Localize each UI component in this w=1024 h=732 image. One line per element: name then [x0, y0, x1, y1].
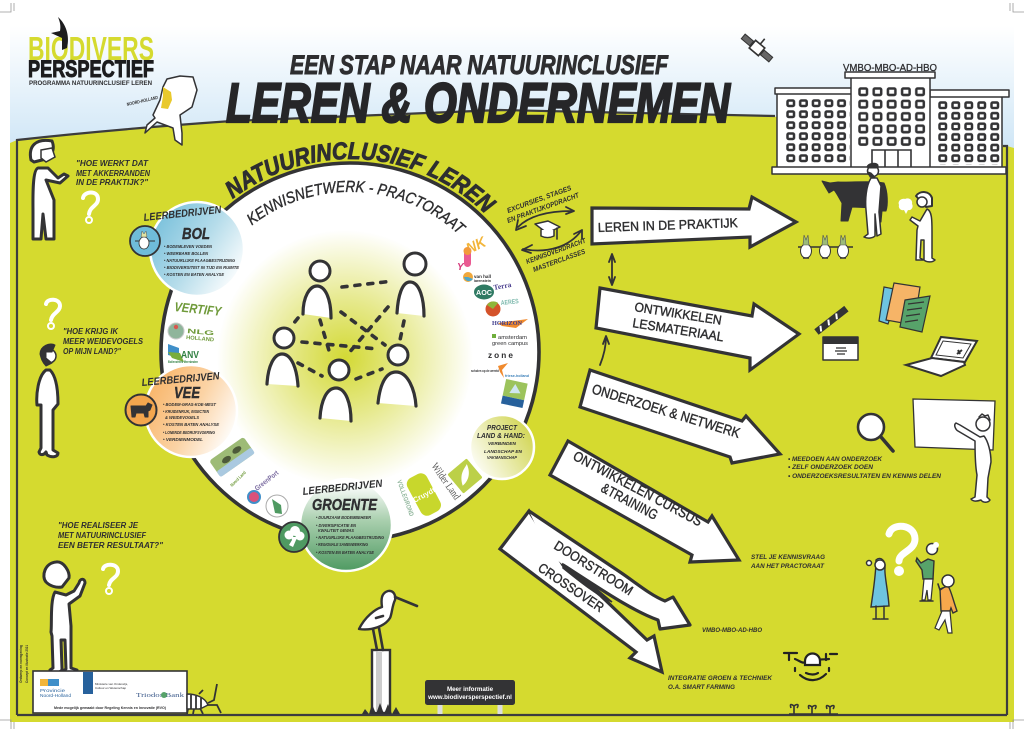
- sign board: [425, 680, 515, 705]
- bubble eyebrow: LEERBEDRIJVEN: [143, 204, 222, 224]
- figure: farmer with cow: [822, 163, 887, 238]
- logo: Rijksoverheid ministerie: [83, 672, 128, 694]
- bubble list: • LONENDE BEDRIJFSVOERING: [163, 430, 215, 435]
- bubble list: • NATUURLIJKE PLAAGBESTRIJDING: [316, 535, 384, 540]
- building base: [772, 167, 1006, 174]
- title line one: EEN STAP NAAR NATUURINCLUSIEF: [290, 50, 669, 80]
- face: [41, 148, 55, 162]
- left wing: [777, 93, 852, 168]
- logo: green leaf tile: [447, 458, 483, 494]
- logo: Cruydt tile: Cruydt: [411, 485, 437, 505]
- text: kennisvraag: AAN HET PRACTORAAT: [750, 563, 825, 570]
- knowledge exchange arrows: [506, 185, 615, 365]
- person C: [267, 328, 298, 386]
- logo: green tile with bird: [501, 379, 528, 408]
- bubble title: PROJECT: [487, 425, 518, 432]
- research list: • ONDERZOEKSRESULTATEN EN KENNIS DELEN: [788, 473, 941, 480]
- stork beak: [395, 597, 417, 606]
- figure: woman with broccoli: [899, 192, 935, 262]
- logo: ANV: Bollenstreek Meerlanden: [168, 360, 198, 364]
- logo: ANV: [168, 344, 199, 364]
- icon: black cow: [822, 181, 887, 222]
- bubble list: • DUURZAAM BODEMBEHEER: [316, 515, 372, 520]
- logo: Yonk: [457, 233, 490, 273]
- logo: Wilder Land: Wilder Land: [429, 461, 463, 502]
- icon: question mark: [46, 300, 60, 329]
- grass: [362, 703, 400, 714]
- photo tile: [209, 437, 255, 477]
- text: kennisvraag: [750, 554, 825, 570]
- question line two: MEER WEIDEVOGELS: [63, 336, 143, 346]
- map: Netherlands with Noord-Holland: [126, 76, 197, 145]
- logo: Aeres: [486, 298, 520, 316]
- panel box: [33, 671, 187, 713]
- credits vertical: [19, 645, 29, 683]
- bubble list: • WEERBARE BOLLEN: [164, 251, 209, 256]
- logo: Horizon: [492, 319, 528, 328]
- logo: Vollegrond: VOLLEGROND: [395, 479, 415, 518]
- bubble list: • KOSTEN BATEN ANALYSE: [163, 422, 220, 427]
- logo: AOC Terra: AOC: [476, 290, 492, 297]
- map label: NOORD-HOLLAND: [126, 95, 159, 107]
- network of people: [267, 253, 426, 421]
- farmer head: [868, 166, 878, 176]
- logo: Aeres: AERES: [500, 298, 520, 307]
- person E: [378, 345, 416, 406]
- stork body: [359, 591, 395, 629]
- dotted connections: [290, 281, 404, 379]
- woman body: [910, 209, 935, 262]
- woman face: [917, 197, 927, 207]
- bubble list: • KOSTEN EN BATEN ANALYSE: [316, 550, 375, 555]
- body: [50, 579, 85, 673]
- figure: curly-haired person: [44, 562, 85, 673]
- logo: NLG Holland: HOLLAND: [186, 335, 214, 343]
- horizon and frame line: [17, 110, 1007, 715]
- heading: kennisnetwerk: KENNISNETWERK - PRACTORAAT: [246, 180, 467, 232]
- text: integratie groen en techniek: O.A. SMART FARMING: [668, 684, 736, 691]
- logo: Yonk: Y: [457, 262, 465, 273]
- child blue: [866, 558, 889, 619]
- bubble list: KWALITEIT GEWAS: [318, 528, 355, 533]
- logo: Provincie Noord-Holland: Provincie: [40, 688, 66, 693]
- bubble body: [484, 441, 523, 460]
- label: masterclasses: MASTERCLASSES: [532, 248, 587, 274]
- bubble disc: [470, 415, 534, 479]
- logos left: Vertify, NLG, ANV: [168, 299, 223, 364]
- hair and beard: [40, 344, 55, 366]
- logo: ANV: ANV: [181, 350, 199, 361]
- icon: question mark: [83, 192, 98, 223]
- title line two: LEREN & ONDERNEMEN: [226, 71, 731, 134]
- logo: Provincie Noord-Holland: Noord-Holland: [40, 693, 72, 698]
- figure: man with beard: [37, 344, 58, 457]
- question line three: IN DE PRAKTIJK?": [76, 177, 149, 187]
- logo: Green Port: GreenPort: [254, 469, 281, 493]
- bubble body: VERBINDEN: [488, 441, 517, 446]
- logos bottom left: [209, 437, 288, 517]
- background: sky: [10, 15, 1014, 150]
- question line two: MET NATUURINCLUSIEF: [58, 530, 147, 540]
- title: [226, 50, 731, 134]
- bubble body: VAKMANSCHAP: [487, 455, 518, 460]
- stork wing: [376, 616, 383, 618]
- logo wordmark top: BIODIVERS: [28, 30, 154, 67]
- logo: Amsterdam Green Campus: amsterdam: [498, 335, 527, 341]
- bubble list: • BODEM-GRAS-KOE-MEST: [163, 402, 217, 407]
- bubble list: • REGIONALE SAMENWERKING: [316, 542, 368, 547]
- arrow: research to material: [600, 336, 609, 365]
- bubble list: • DIVERSIFICATIE EN: [316, 523, 357, 528]
- entrance doors: [872, 150, 911, 167]
- icon: laptop: [906, 337, 977, 376]
- bubble title: GROENTE: [312, 497, 378, 514]
- bubble disc: [150, 202, 244, 296]
- bubble list: [164, 244, 240, 277]
- figure: stork on post: [359, 591, 417, 714]
- icon: clapperboard: [814, 306, 858, 360]
- credits vertical: Concept en illustratie 2021: [25, 645, 29, 683]
- whiteboard: [913, 399, 995, 450]
- bubble: project land en hand: [470, 415, 534, 479]
- bubble disc: [145, 365, 237, 457]
- label: kennisoverdracht: KENNISOVERDRACHT: [525, 238, 587, 266]
- logo: AOC Terra: [474, 280, 512, 300]
- icon: three onions: [798, 235, 853, 258]
- bubble eyebrow: LEERBEDRIJVEN: [302, 478, 383, 498]
- icon: swallow: [51, 17, 68, 50]
- child orange: [935, 575, 957, 633]
- sponsor panel: [33, 671, 187, 713]
- arrow shape crossover: [500, 511, 662, 672]
- icon: beetle: [187, 684, 221, 714]
- arrow label: LEREN IN DE PRAKTIJK: [598, 215, 738, 235]
- sign text line two: www.biodiversperspectief.nl: [427, 694, 512, 701]
- arrow: between practice and material: [609, 254, 615, 285]
- credits vertical: Ontwerp en vormgeving: [19, 645, 23, 683]
- logo: Van Hall Larenstein: van hall: [474, 274, 491, 279]
- logo: Van Hall Larenstein: [463, 272, 491, 283]
- sponsor note: Mede mogelijk gemaakt door Regeling Kennis en Innovatie (RVO): [54, 706, 167, 710]
- label: excursies: EXCURSIES, STAGES: [506, 185, 573, 215]
- logo: colour flower: [248, 491, 260, 503]
- bubble list: • VERDIENMODEL: [163, 437, 203, 442]
- bubble: leerbedrijven groente: [279, 478, 392, 571]
- bubble: leerbedrijven bol: [130, 202, 244, 296]
- question line three: OP MIJN LAND?": [63, 346, 122, 356]
- school building: [772, 62, 1009, 174]
- logos bottom right: [395, 458, 483, 519]
- bubble title: BOL: [182, 226, 210, 243]
- map highlight: [161, 87, 172, 109]
- research list: • ZELF ONDERZOEK DOEN: [788, 464, 873, 471]
- teacher body: [955, 423, 991, 502]
- heading: natuurinclusief leren: NATUURINCLUSIEF LEREN: [225, 142, 498, 213]
- bubble list: [163, 402, 220, 442]
- figure: teacher at whiteboard: [913, 399, 995, 502]
- logo: NLG Holland: [168, 323, 214, 343]
- arrow: leren in de praktijk: [592, 197, 796, 247]
- sign: meer informatie: [425, 680, 515, 714]
- logo tagline: PROGRAMMA NATUURINCLUSIEF LEREN: [29, 81, 152, 87]
- dark wedge between arrows: [563, 564, 612, 602]
- teacher hair: [979, 414, 990, 420]
- bubble list: • KRUIDENRIJK, INSECTEN: [163, 409, 210, 414]
- hair: [30, 140, 53, 162]
- arrow shape doorstroom fill: [529, 511, 690, 629]
- map outline: [145, 76, 197, 145]
- question: third person: "HOE REALISEER JE: [58, 520, 138, 530]
- arrow shape doorstroom outline: [529, 511, 690, 629]
- teacher head: [976, 417, 990, 431]
- arrow: onderzoek en netwerk: [580, 370, 780, 463]
- icon: graduation cap: [535, 221, 560, 239]
- central glow: [217, 230, 473, 486]
- bubble list: & WEIDEVOGELS: [165, 415, 200, 420]
- logo: Biodivers Perspectief: [28, 17, 154, 87]
- arrow label line one: ONTWIKKELEN CURSUS: [571, 448, 705, 529]
- body: [33, 168, 68, 239]
- arrow label: ONDERZOEK & NETWERK: [590, 381, 743, 441]
- bubble list: • NATUURLIJKE PLAAGBESTRIJDING: [164, 258, 235, 263]
- text: kennisvraag: STEL JE KENNISVRAAG: [751, 554, 825, 561]
- logo: round seal: [266, 495, 288, 517]
- sign posts: [440, 704, 500, 714]
- logo: Horizon: HORIZON: [492, 320, 522, 327]
- sign text line one: Meer informatie: [447, 686, 494, 693]
- bubble title: VEE: [174, 385, 201, 402]
- icon: seedlings: [789, 705, 838, 714]
- arrow: ontwikkelen cursus en training: [550, 441, 739, 562]
- icon: satellite: [740, 27, 779, 63]
- farmer: [864, 178, 881, 238]
- hair and head: [44, 562, 69, 587]
- bubble eyebrow: LEERBEDRIJVEN: [141, 370, 220, 389]
- figures: three people with question mark: [866, 526, 957, 633]
- logo: Triodos Bank: Triodos Bank: [136, 692, 185, 699]
- bubble body: LANDSCHAP EN: [484, 449, 523, 454]
- building label: VMBO-MBO-AD-HBO: [843, 62, 937, 74]
- icon: question mark: [103, 565, 118, 594]
- logo: round seal centre: [272, 499, 282, 514]
- icon: stack of documents: [879, 283, 930, 332]
- white disc: [161, 163, 539, 541]
- logo: Rijksoverheid ministerie: Cultuur en Wetenschap: [95, 686, 126, 690]
- logo: Wellant / Noord-Holland: friese-holland: [505, 374, 530, 378]
- icon: magnifying glass: [858, 414, 893, 451]
- bubble disc: [300, 479, 392, 571]
- question: woman: "HOE WERKT DAT: [76, 158, 149, 168]
- logo: AOC Terra: Terra: [493, 280, 512, 292]
- arrow label doorstroom: DOORSTROOM: [551, 538, 636, 598]
- icon: broccoli: [899, 198, 913, 214]
- logo: Rijksoverheid ministerie: Ministerie van Onderwijs,: [95, 682, 128, 686]
- arrow: to circle: [522, 230, 582, 253]
- arrow label line two: LESMATERIAAL: [632, 315, 725, 344]
- logo: Noord Land: Noord Land: [229, 470, 247, 488]
- logos right: schools: [457, 233, 530, 408]
- logo: Amsterdam Green Campus: [492, 334, 528, 347]
- question: man: "HOE KRIJG IK: [63, 326, 119, 336]
- head: [42, 349, 56, 363]
- arrow: to school: [516, 207, 574, 230]
- middle block: [851, 76, 930, 168]
- logo: Zone College: zone: [488, 351, 515, 360]
- label: praktijkopdracht: EN PRAKTIJKOPDRACHT: [506, 192, 581, 225]
- bubble list: • BIODIVERSITEIT IN TIJD EN RUIMTE: [164, 265, 240, 270]
- bubble title two: LAND & HAND:: [477, 433, 525, 440]
- bubble list: • BODEMLEVEN VOEDEN: [164, 244, 213, 249]
- farmer hair and beard: [867, 163, 878, 177]
- bubble: leerbedrijven vee: [126, 365, 237, 457]
- stork legs: [373, 628, 383, 650]
- text: integratie groen en techniek: INTEGRATIE GROEN & TECHNIEK: [668, 675, 773, 682]
- logo: Van Hall Larenstein: larenstein: [474, 279, 491, 283]
- arrow: ontwikkelen lesmateriaal: [596, 288, 799, 370]
- arrow label line two: &TRAINING: [599, 480, 661, 523]
- post: [372, 650, 390, 713]
- logo: Yonk: NK: [464, 233, 490, 258]
- person B: [397, 253, 426, 316]
- logo: Wellant / Noord-Holland: scholen op de wereld: [471, 369, 499, 373]
- badge: onion: [130, 226, 160, 256]
- text: integratie groen en techniek: [668, 675, 773, 691]
- logo: Wellant / Noord-Holland: [471, 363, 530, 378]
- text: vmbo-mbo-ad-hbo: VMBO-MBO-AD-HBO: [702, 627, 762, 634]
- child green: [916, 542, 939, 601]
- woman hair: [916, 192, 932, 207]
- badge: broccoli: [279, 522, 309, 552]
- right wing: [929, 95, 1002, 168]
- logo: Vertify: VERTIFY: [174, 299, 223, 319]
- question line three: EEN BETER RESULTAAT?": [58, 540, 164, 550]
- research list: • MEEDOEN AAN ONDERZOEK: [788, 456, 882, 463]
- main circle: kennisnetwerk: [159, 142, 541, 538]
- arrow: doorstroom and crossover: [500, 511, 690, 672]
- arrow label crossover: CROSSOVER: [535, 560, 607, 615]
- question line two: MET AKKERRANDEN: [76, 168, 151, 178]
- research list: [788, 456, 941, 480]
- logo: Amsterdam Green Campus: green campus: [492, 341, 528, 347]
- bubble list: [316, 515, 384, 555]
- logo: Provincie Noord-Holland: [40, 679, 72, 698]
- icon: drone: [784, 653, 837, 680]
- body: [37, 370, 58, 457]
- logo: NLG Holland: NLG: [187, 328, 214, 337]
- figure: woman top left: [30, 140, 68, 239]
- logo wordmark bottom: PERSPECTIEF: [28, 56, 154, 83]
- arrow label line one: ONTWIKKELEN: [634, 299, 723, 328]
- big question mark: [889, 526, 915, 576]
- bubble list: • KOSTEN EN BATEN ANALYSE: [164, 272, 225, 277]
- person D: [320, 360, 351, 421]
- person A: [303, 261, 331, 318]
- badge: cow: [126, 394, 156, 426]
